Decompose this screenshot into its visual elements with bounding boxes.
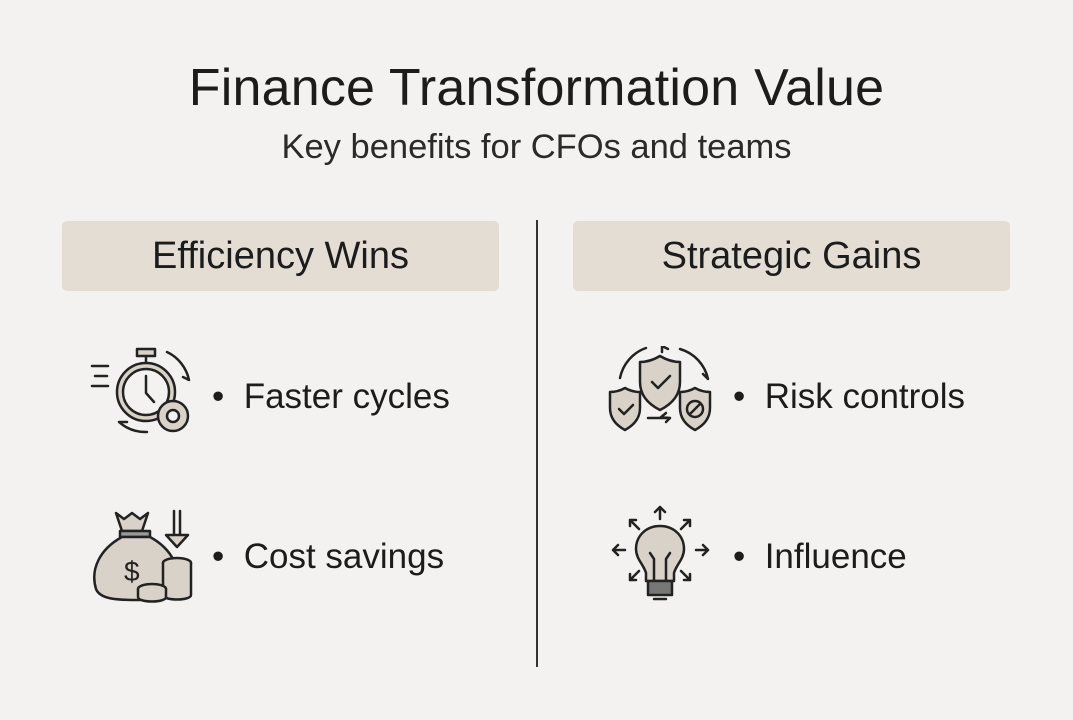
text: faster cycles: • Faster cycles xyxy=(212,377,450,416)
icon: money bag with coins: $ xyxy=(124,556,140,587)
icon: stopwatch with gear xyxy=(90,348,190,434)
title: Finance Transformation Value xyxy=(189,59,884,117)
icon: money bag with coins xyxy=(93,510,192,603)
icon: lightbulb xyxy=(612,506,710,600)
subtitle: Key benefits for CFOs and teams xyxy=(281,128,792,166)
divider xyxy=(536,220,538,667)
text: cost savings: • Cost savings xyxy=(212,537,444,576)
heading: strategic gains xyxy=(573,221,1010,291)
panel: efficiency wins xyxy=(62,221,499,603)
icon: shields cycle xyxy=(608,346,712,432)
heading: efficiency wins: Efficiency Wins xyxy=(152,234,409,276)
text: influence: • Influence xyxy=(733,537,907,576)
heading: efficiency wins xyxy=(62,221,499,291)
heading: strategic gains: Strategic Gains xyxy=(662,234,921,276)
panel: strategic gains xyxy=(573,221,1010,600)
text: risk controls: • Risk controls xyxy=(733,377,965,416)
